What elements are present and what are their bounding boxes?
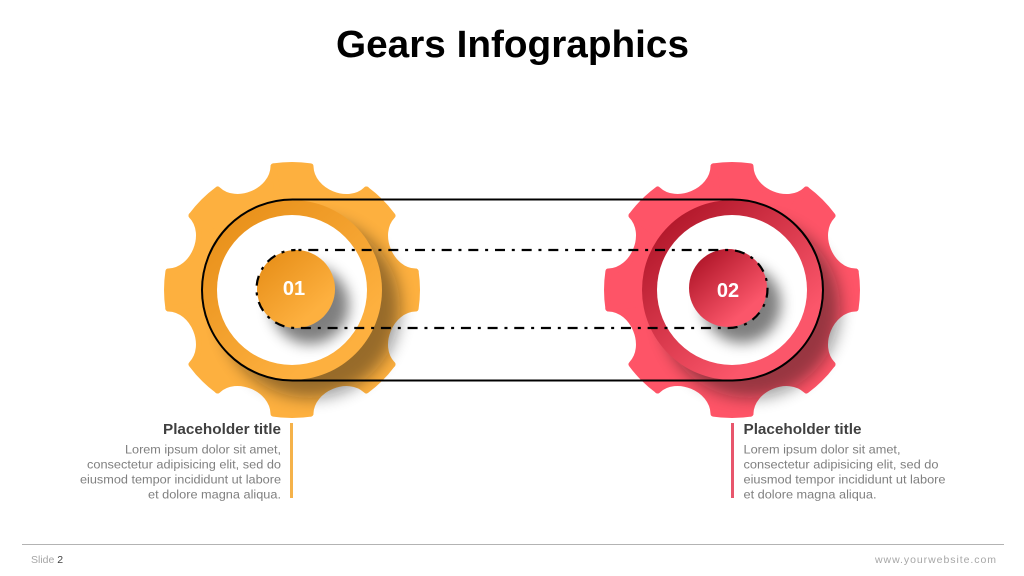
outer belt solid outline [202, 200, 823, 380]
right body: consectetur adipisicing elit, sed do [744, 458, 939, 472]
title: Gears Infographics [336, 24, 689, 66]
text block: left [80, 422, 281, 502]
right body: eiusmod tempor incididunt ut labore [744, 472, 946, 486]
footer slide number: Slide 2 [31, 554, 63, 566]
inner belt dash-dot outline [256, 250, 768, 328]
left body: Lorem ipsum dolor sit amet, [125, 442, 281, 456]
ring shadow red [660, 218, 840, 398]
ring hole orange [217, 215, 367, 365]
left body: et dolore magna aliqua. [148, 488, 281, 502]
ring red [642, 200, 822, 380]
number 01: 01 [283, 278, 305, 300]
accent bar: right [731, 423, 734, 498]
right body: et dolore magna aliqua. [744, 488, 876, 502]
right body [744, 442, 946, 502]
ring orange [202, 200, 382, 380]
hub shadow orange [271, 266, 349, 344]
gear body orange [151, 149, 433, 431]
left body: consectetur adipisicing elit, sed do [87, 458, 281, 472]
text block: right [744, 422, 946, 502]
right body: Lorem ipsum dolor sit amet, [744, 442, 900, 456]
footer website: www.yourwebsite.com [874, 554, 996, 566]
icon: red gear [591, 149, 873, 431]
hub orange [257, 250, 335, 328]
ring shadow orange [220, 218, 400, 398]
hub red [689, 249, 767, 327]
icon: orange gear [151, 149, 433, 431]
right heading: Placeholder title [744, 422, 862, 438]
left heading: Placeholder title [163, 422, 281, 438]
ring hole red [657, 215, 807, 365]
gear body red [591, 149, 873, 431]
left body: eiusmod tempor incididunt ut labore [80, 472, 281, 486]
number 02: 02 [717, 280, 739, 302]
hub shadow red [703, 265, 781, 343]
accent bar: left [290, 423, 293, 498]
left body [80, 442, 281, 502]
